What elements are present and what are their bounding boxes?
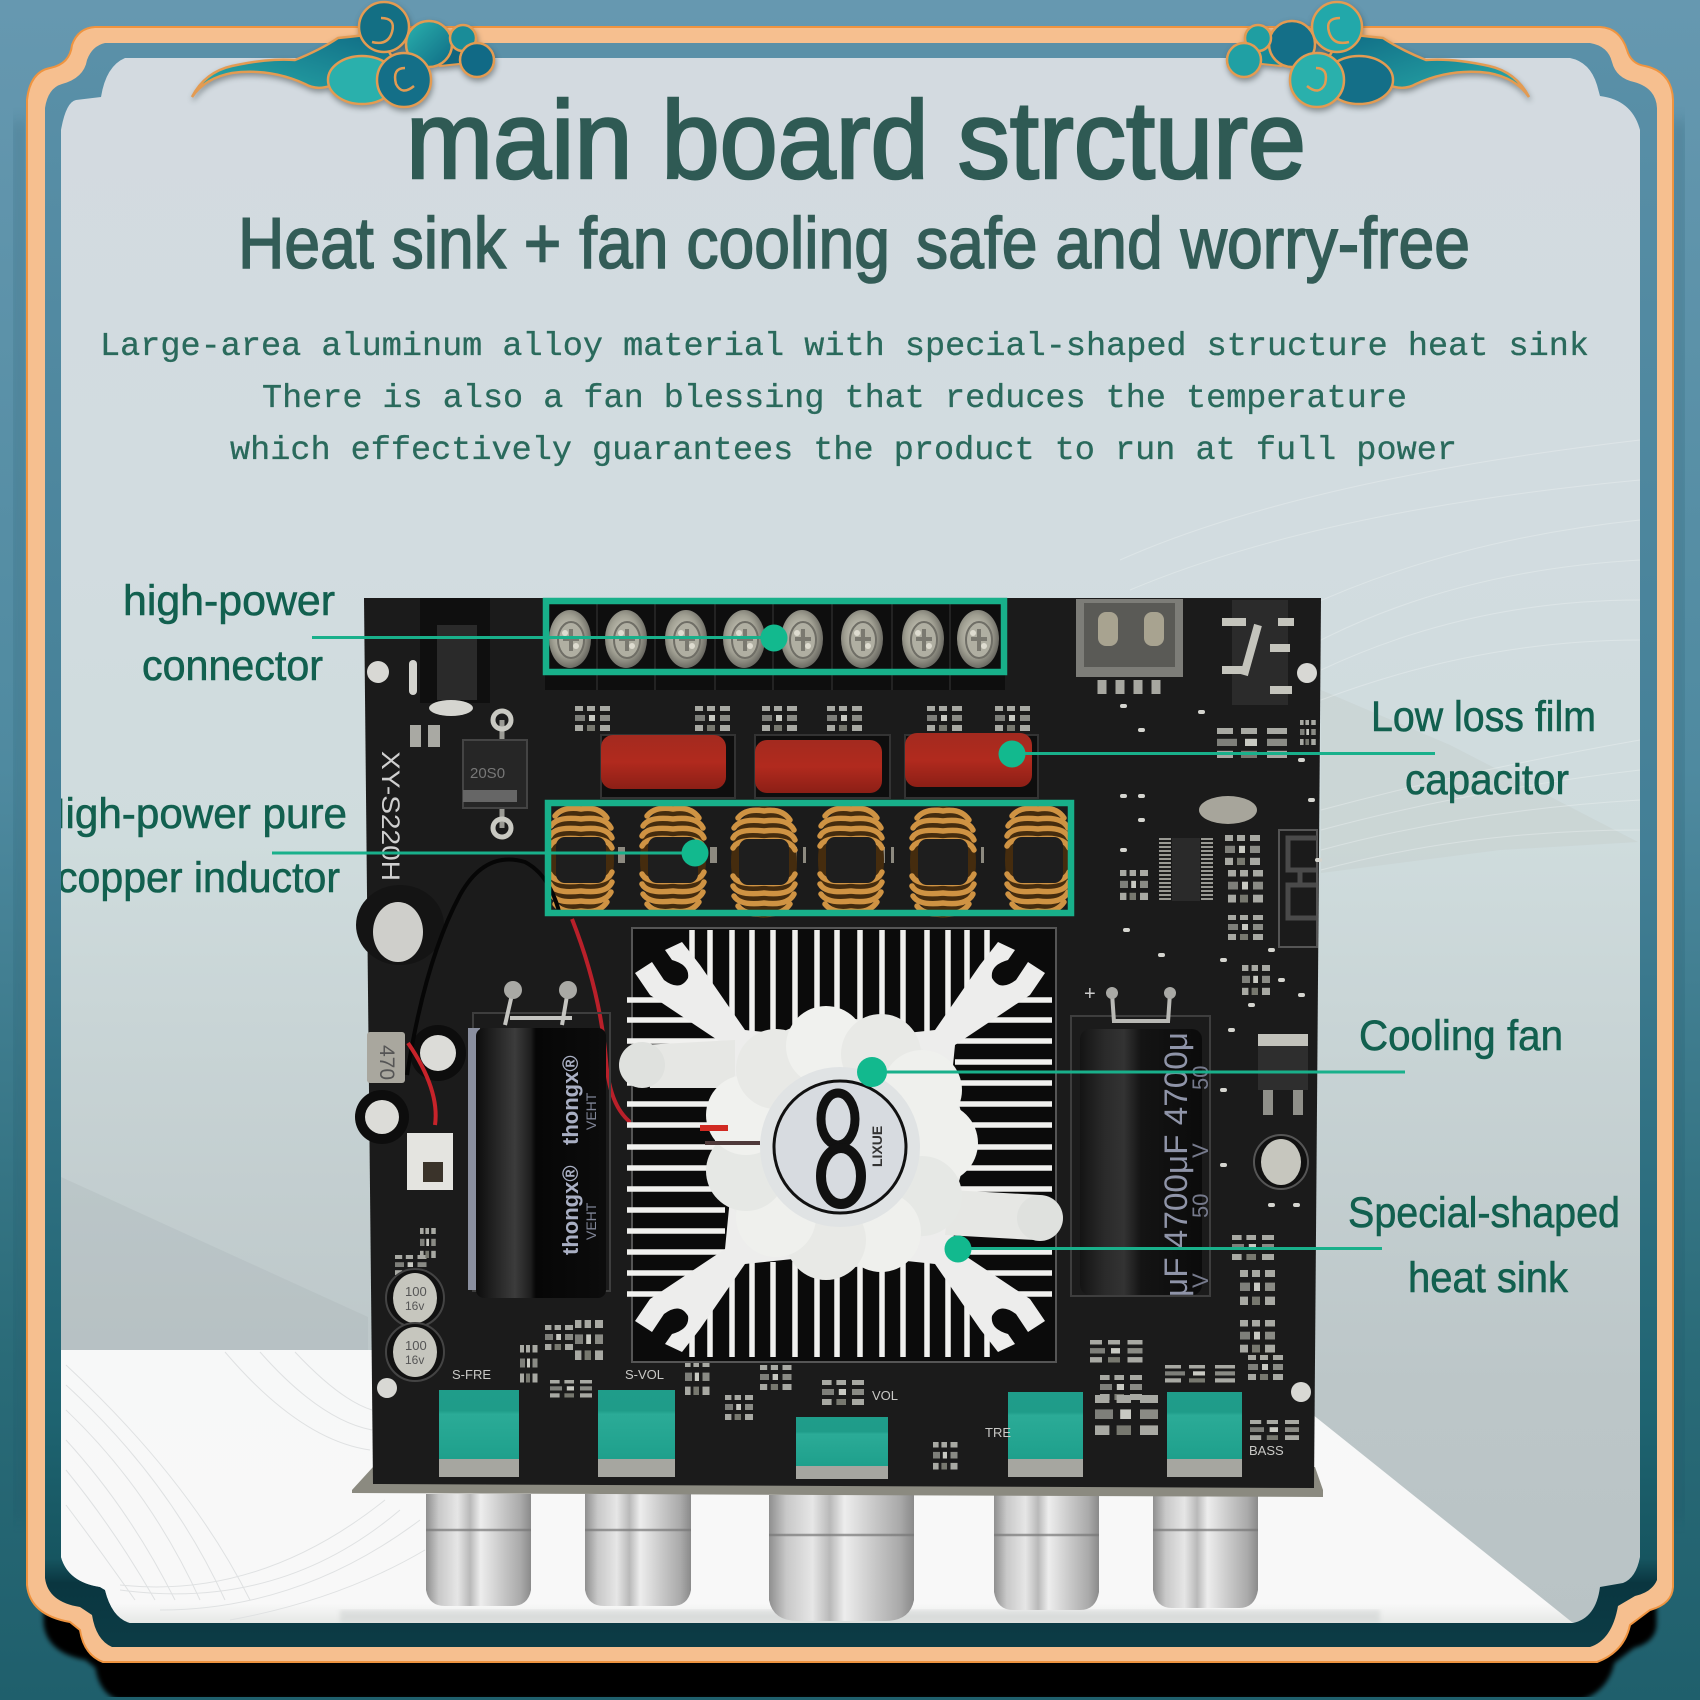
circuit board xyxy=(364,598,1321,1488)
audio jack xyxy=(1222,600,1294,705)
right electrolytic capacitor xyxy=(1071,983,1213,1297)
callout box: high-power connector xyxy=(546,601,1004,672)
knob labels on the board xyxy=(452,1367,1284,1458)
label: high-power pure copper inductor: copper inductor xyxy=(57,854,340,902)
DC power jack xyxy=(409,598,490,716)
right electrolytic capacitor: + xyxy=(1084,983,1096,1005)
label: special-shaped heat sink: Special-shaped xyxy=(1348,1189,1620,1237)
ornament: right cloud xyxy=(1227,2,1529,107)
right electrolytic capacitor: V xyxy=(1188,1273,1213,1288)
background decoration: waves and floor xyxy=(61,440,1640,1623)
heat sink xyxy=(627,928,1056,1362)
inductor coils xyxy=(548,804,1071,918)
label: high-power pure copper inductor: High-power pure xyxy=(35,790,347,838)
label: high-power pure copper inductor xyxy=(61,796,346,902)
label: low loss film capacitor: capacitor xyxy=(1405,756,1569,804)
film capacitors xyxy=(601,733,1038,798)
label: low loss film capacitor: Low loss film xyxy=(1371,693,1596,741)
left electrolytic capacitor: thongx® xyxy=(558,1055,583,1145)
radial capacitors, inductor 470 and fan connector xyxy=(355,885,466,1190)
right-side chips: IC, crystal, antenna, MOSFET xyxy=(1165,796,1317,1115)
label: low loss film capacitor xyxy=(1371,693,1596,804)
left electrolytic capacitor: thongx® xyxy=(558,1165,583,1255)
callout line: heat sink xyxy=(944,1236,1382,1262)
title: main board strcture xyxy=(406,79,1306,202)
knob labels on the board: BASS xyxy=(1249,1443,1284,1458)
ornament: left cloud xyxy=(192,2,494,107)
left electrolytic capacitor xyxy=(468,981,610,1298)
SMD electrolytic capacitors: 100 xyxy=(405,1338,427,1353)
label: high-power connector xyxy=(123,577,335,690)
mounting holes xyxy=(367,661,1317,1402)
USB socket xyxy=(1076,599,1183,694)
subtitle: safe and worry-free xyxy=(916,204,1470,284)
fan logo xyxy=(821,1093,885,1204)
potentiometers xyxy=(439,1390,1242,1479)
fan logo: LIXUE xyxy=(869,1126,885,1167)
callout line: high-power connector xyxy=(312,624,788,652)
callout box: high-power pure copper inductor xyxy=(548,803,1071,913)
right electrolytic capacitor: V xyxy=(1188,1143,1213,1158)
knob labels on the board: VOL xyxy=(872,1388,898,1403)
diode: 20S0 xyxy=(470,765,505,782)
label: high-power connector: connector xyxy=(142,642,323,690)
SMD electrolytic capacitors: 16v xyxy=(405,1299,424,1313)
subtitle: Heat sink + fan cooling xyxy=(238,204,890,284)
callout line: film capacitor xyxy=(998,740,1435,768)
cooling fan xyxy=(619,1006,1063,1280)
SMD electrolytic capacitors: 16v xyxy=(405,1353,424,1367)
description text: which effectively guarantees the product to run at full power xyxy=(230,432,1457,470)
description text: There is also a fan blessing that reduces the temperature xyxy=(262,380,1407,418)
knobs xyxy=(426,1494,1258,1621)
SMD electrolytic capacitors xyxy=(386,1135,1308,1381)
label: special-shaped heat sink xyxy=(1348,1189,1620,1302)
left electrolytic capacitor: VEHT xyxy=(583,1202,599,1240)
knob labels on the board: TRE xyxy=(985,1425,1011,1440)
knob labels on the board: S-FRE xyxy=(452,1367,491,1382)
callout line: cooling fan xyxy=(857,1057,1405,1087)
SMD components xyxy=(395,706,1316,1470)
description text: Large-area aluminum alloy material with special-shaped structure heat sink xyxy=(100,328,1589,366)
SMD electrolytic capacitors: 100 xyxy=(405,1284,427,1299)
left electrolytic capacitor: VEHT xyxy=(583,1092,599,1130)
radial capacitors, inductor 470 and fan connector: 470 xyxy=(375,1045,398,1080)
terminal block xyxy=(545,600,1005,690)
right electrolytic capacitor: 50 xyxy=(1188,1066,1213,1090)
right electrolytic capacitor: 50 xyxy=(1188,1194,1213,1218)
board plate edge xyxy=(352,1467,1323,1497)
label: high-power connector: high-power xyxy=(123,577,335,625)
description text xyxy=(100,328,1589,470)
diode xyxy=(410,711,527,837)
fan wires xyxy=(407,859,760,1140)
right electrolytic capacitor: μF 4700μF 4700μ xyxy=(1158,1032,1194,1297)
label: cooling fan: Cooling fan xyxy=(1359,1012,1563,1060)
knob labels on the board: S-VOL xyxy=(625,1367,664,1382)
label: special-shaped heat sink: heat sink xyxy=(1408,1254,1568,1302)
PCB via dots xyxy=(1122,706,1320,1205)
subtitle xyxy=(238,204,1470,284)
callout line: inductor xyxy=(272,840,708,866)
model marking: XY-S220H xyxy=(376,751,404,881)
